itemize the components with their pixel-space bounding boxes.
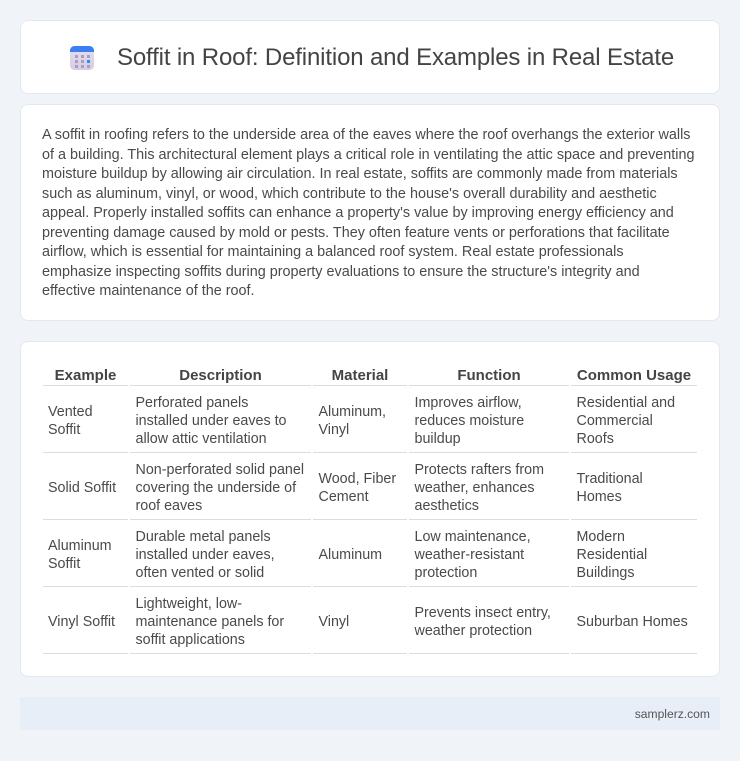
definition text: such as aluminum, vinyl, or wood, which contribute to the house's overall durability and aesthetic <box>42 186 657 202</box>
soffit examples table: often vented or solid <box>136 565 264 581</box>
soffit examples table: covering the underside of <box>136 480 296 496</box>
soffit examples table: maintenance panels for <box>136 614 284 630</box>
soffit examples table: Suburban Homes <box>576 614 688 630</box>
soffit examples table: Protects rafters from <box>414 462 544 478</box>
soffit examples table: Aluminum <box>318 547 382 563</box>
header panel <box>20 20 720 94</box>
soffit examples table: Function <box>457 367 521 384</box>
soffit examples table: Homes <box>576 489 622 505</box>
soffit examples table: Perforated panels <box>136 395 248 411</box>
soffit examples table: Common Usage <box>577 367 691 384</box>
soffit examples table: Prevents insect entry, <box>414 605 551 621</box>
soffit examples table: Material <box>332 367 388 384</box>
title: Soffit in Roof: Definition and Examples in Real Estate <box>117 44 674 71</box>
soffit examples table: Solid Soffit <box>48 480 116 496</box>
soffit examples table: aesthetics <box>414 498 479 514</box>
soffit examples table: Commercial <box>576 413 653 429</box>
soffit examples table: Low maintenance, <box>414 529 531 545</box>
soffit examples table: installed under eaves to <box>136 413 287 429</box>
soffit examples table: Residential <box>576 547 647 563</box>
soffit examples table: protection <box>414 565 477 581</box>
icon: calendar <box>70 46 94 70</box>
soffit examples table <box>43 367 697 654</box>
footer bar <box>20 697 720 730</box>
soffit examples table: Lightweight, low- <box>136 596 242 612</box>
soffit examples table: Vinyl <box>318 422 349 438</box>
soffit examples table: roof eaves <box>136 498 202 514</box>
soffit examples table: allow attic ventilation <box>136 431 267 447</box>
soffit examples table: Vented <box>48 404 93 420</box>
soffit examples table: Non-perforated solid panel <box>136 462 304 478</box>
soffit examples table: Durable metal panels <box>136 529 271 545</box>
definition text: of a building. This architectural element plays a critical role in ventilating the attic space and preventing <box>42 146 694 162</box>
soffit examples table: Vinyl <box>318 614 349 630</box>
panel: definition paragraph <box>20 104 720 321</box>
soffit examples table: Buildings <box>576 565 635 581</box>
soffit examples table: buildup <box>414 431 461 447</box>
definition text: appeal. Properly installed soffits can enhance a property's value by improving energy efficiency and <box>42 205 674 221</box>
panel: examples table <box>20 341 720 677</box>
footer credit: samplerz.com <box>635 707 710 721</box>
definition text: A soffit in roofing refers to the underside area of the eaves where the roof overhangs the exterior walls <box>42 127 690 143</box>
definition text: effective maintenance of the roof. <box>42 283 255 299</box>
definition text: emphasize inspecting soffits during property evaluations to ensure the structure's integrity and <box>42 264 640 280</box>
definition text <box>42 127 694 299</box>
soffit examples table: Modern <box>576 529 625 545</box>
soffit examples table: Example <box>55 367 116 384</box>
soffit examples table: Description <box>179 367 262 384</box>
definition text: moisture buildup by allowing air circulation. In real estate, soffits are commonly made from materials <box>42 166 678 182</box>
soffit examples table: Aluminum <box>48 538 112 554</box>
soffit examples table: weather-resistant <box>414 547 524 563</box>
soffit examples table: Traditional <box>576 471 643 487</box>
soffit examples table: Vinyl Soffit <box>48 614 115 630</box>
soffit examples table: Improves airflow, <box>414 395 522 411</box>
soffit examples table: Soffit <box>48 422 80 438</box>
soffit examples table: Cement <box>318 489 369 505</box>
soffit examples table: Residential and <box>576 395 675 411</box>
soffit examples table: Roofs <box>576 431 614 447</box>
soffit examples table: Soffit <box>48 556 80 572</box>
soffit examples table: weather, enhances <box>414 480 535 496</box>
definition text: airflow, which is essential for maintaining a balanced roof system. Real estate professionals <box>42 244 624 260</box>
definition text: preventing damage caused by mold or pests. They often feature vents or perforations that facilitate <box>42 224 670 240</box>
soffit examples table: Aluminum, <box>318 404 386 420</box>
soffit examples table: installed under eaves, <box>136 547 275 563</box>
soffit examples table: weather protection <box>414 623 532 639</box>
soffit examples table: Wood, Fiber <box>318 471 396 487</box>
soffit examples table: soffit applications <box>136 632 245 648</box>
soffit examples table: reduces moisture <box>414 413 524 429</box>
